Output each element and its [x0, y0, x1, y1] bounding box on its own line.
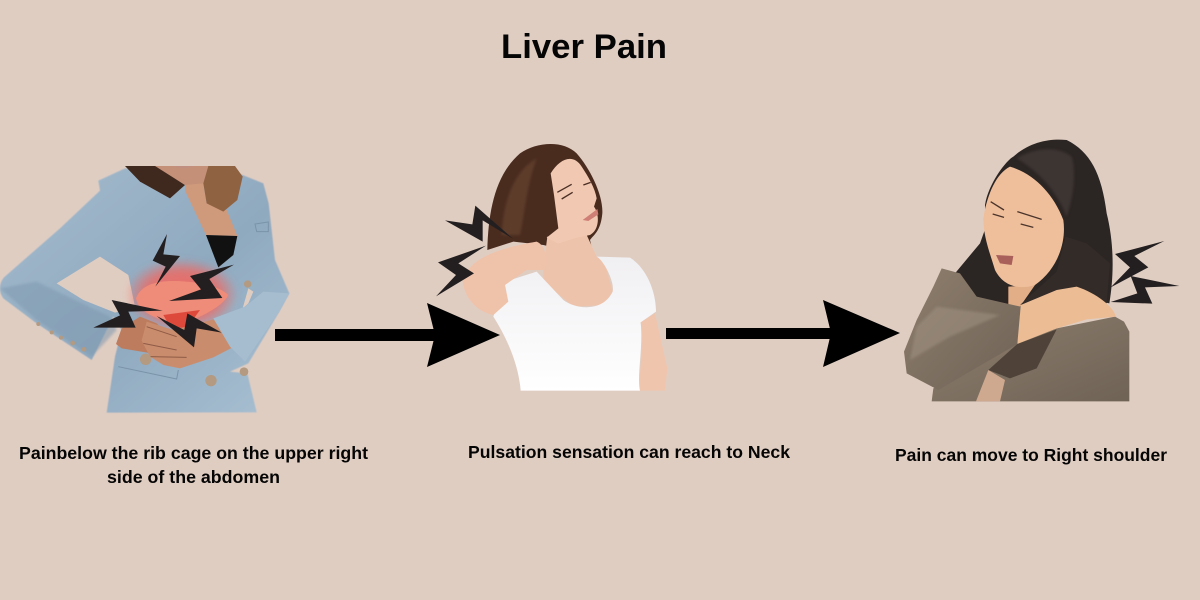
lapel [988, 329, 1057, 378]
lightning bolts [93, 234, 234, 347]
finger lines [143, 327, 187, 357]
sleeve fold [910, 307, 1000, 360]
title: Liver Pain [501, 28, 667, 66]
face [983, 167, 1064, 287]
right arm [640, 313, 667, 391]
hair right [203, 166, 243, 212]
right hand [142, 319, 237, 368]
arm and hand [1017, 287, 1116, 344]
lower red [163, 310, 200, 328]
arrow 1 [275, 303, 500, 367]
sleeve shading [0, 282, 117, 357]
neck and chest [185, 183, 237, 236]
left hand [116, 317, 173, 353]
gap by right arm [243, 288, 253, 308]
facial features [991, 202, 1042, 227]
chin [155, 166, 213, 185]
t-shirt [493, 257, 656, 391]
pocket [255, 222, 268, 232]
lips [172, 166, 195, 169]
caption 1: Painbelow the rib cage on the upper right [19, 443, 368, 463]
figure: woman holding shoulder [904, 140, 1179, 401]
liver [136, 281, 228, 325]
eyes and brows [557, 182, 591, 199]
hair left [125, 166, 185, 198]
raised arm and hand [463, 242, 546, 315]
lightning bolts [436, 206, 513, 296]
lips [996, 255, 1013, 265]
front hair strands [1020, 237, 1110, 305]
hair [487, 144, 602, 257]
hair highlight [502, 158, 537, 235]
arrow 2 [666, 300, 900, 367]
blouse [976, 370, 1005, 401]
caption 2: Pulsation sensation can reach to Neck [468, 442, 790, 462]
neck [1008, 285, 1035, 308]
lips [583, 209, 598, 221]
hair highlight [1017, 149, 1074, 217]
figure: woman holding abdomen [0, 166, 289, 413]
red glow [125, 258, 238, 332]
caption 1: side of the abdomen [107, 467, 280, 487]
hair [955, 140, 1113, 313]
sleeve [904, 268, 1021, 390]
figure: woman holding neck [436, 144, 667, 391]
peplum line [118, 367, 178, 379]
jacket and sleeve [0, 168, 289, 413]
gap between arm and body [57, 257, 135, 313]
sleeve over hands [213, 292, 289, 362]
caption 3: Pain can move to Right shoulder [895, 445, 1167, 465]
lightning bolts [1111, 241, 1179, 304]
neck and chest [543, 235, 613, 307]
jacket torso [932, 317, 1129, 401]
face [547, 159, 598, 243]
caption 1 [19, 443, 368, 487]
buttons [36, 280, 251, 386]
dark top [206, 235, 237, 267]
